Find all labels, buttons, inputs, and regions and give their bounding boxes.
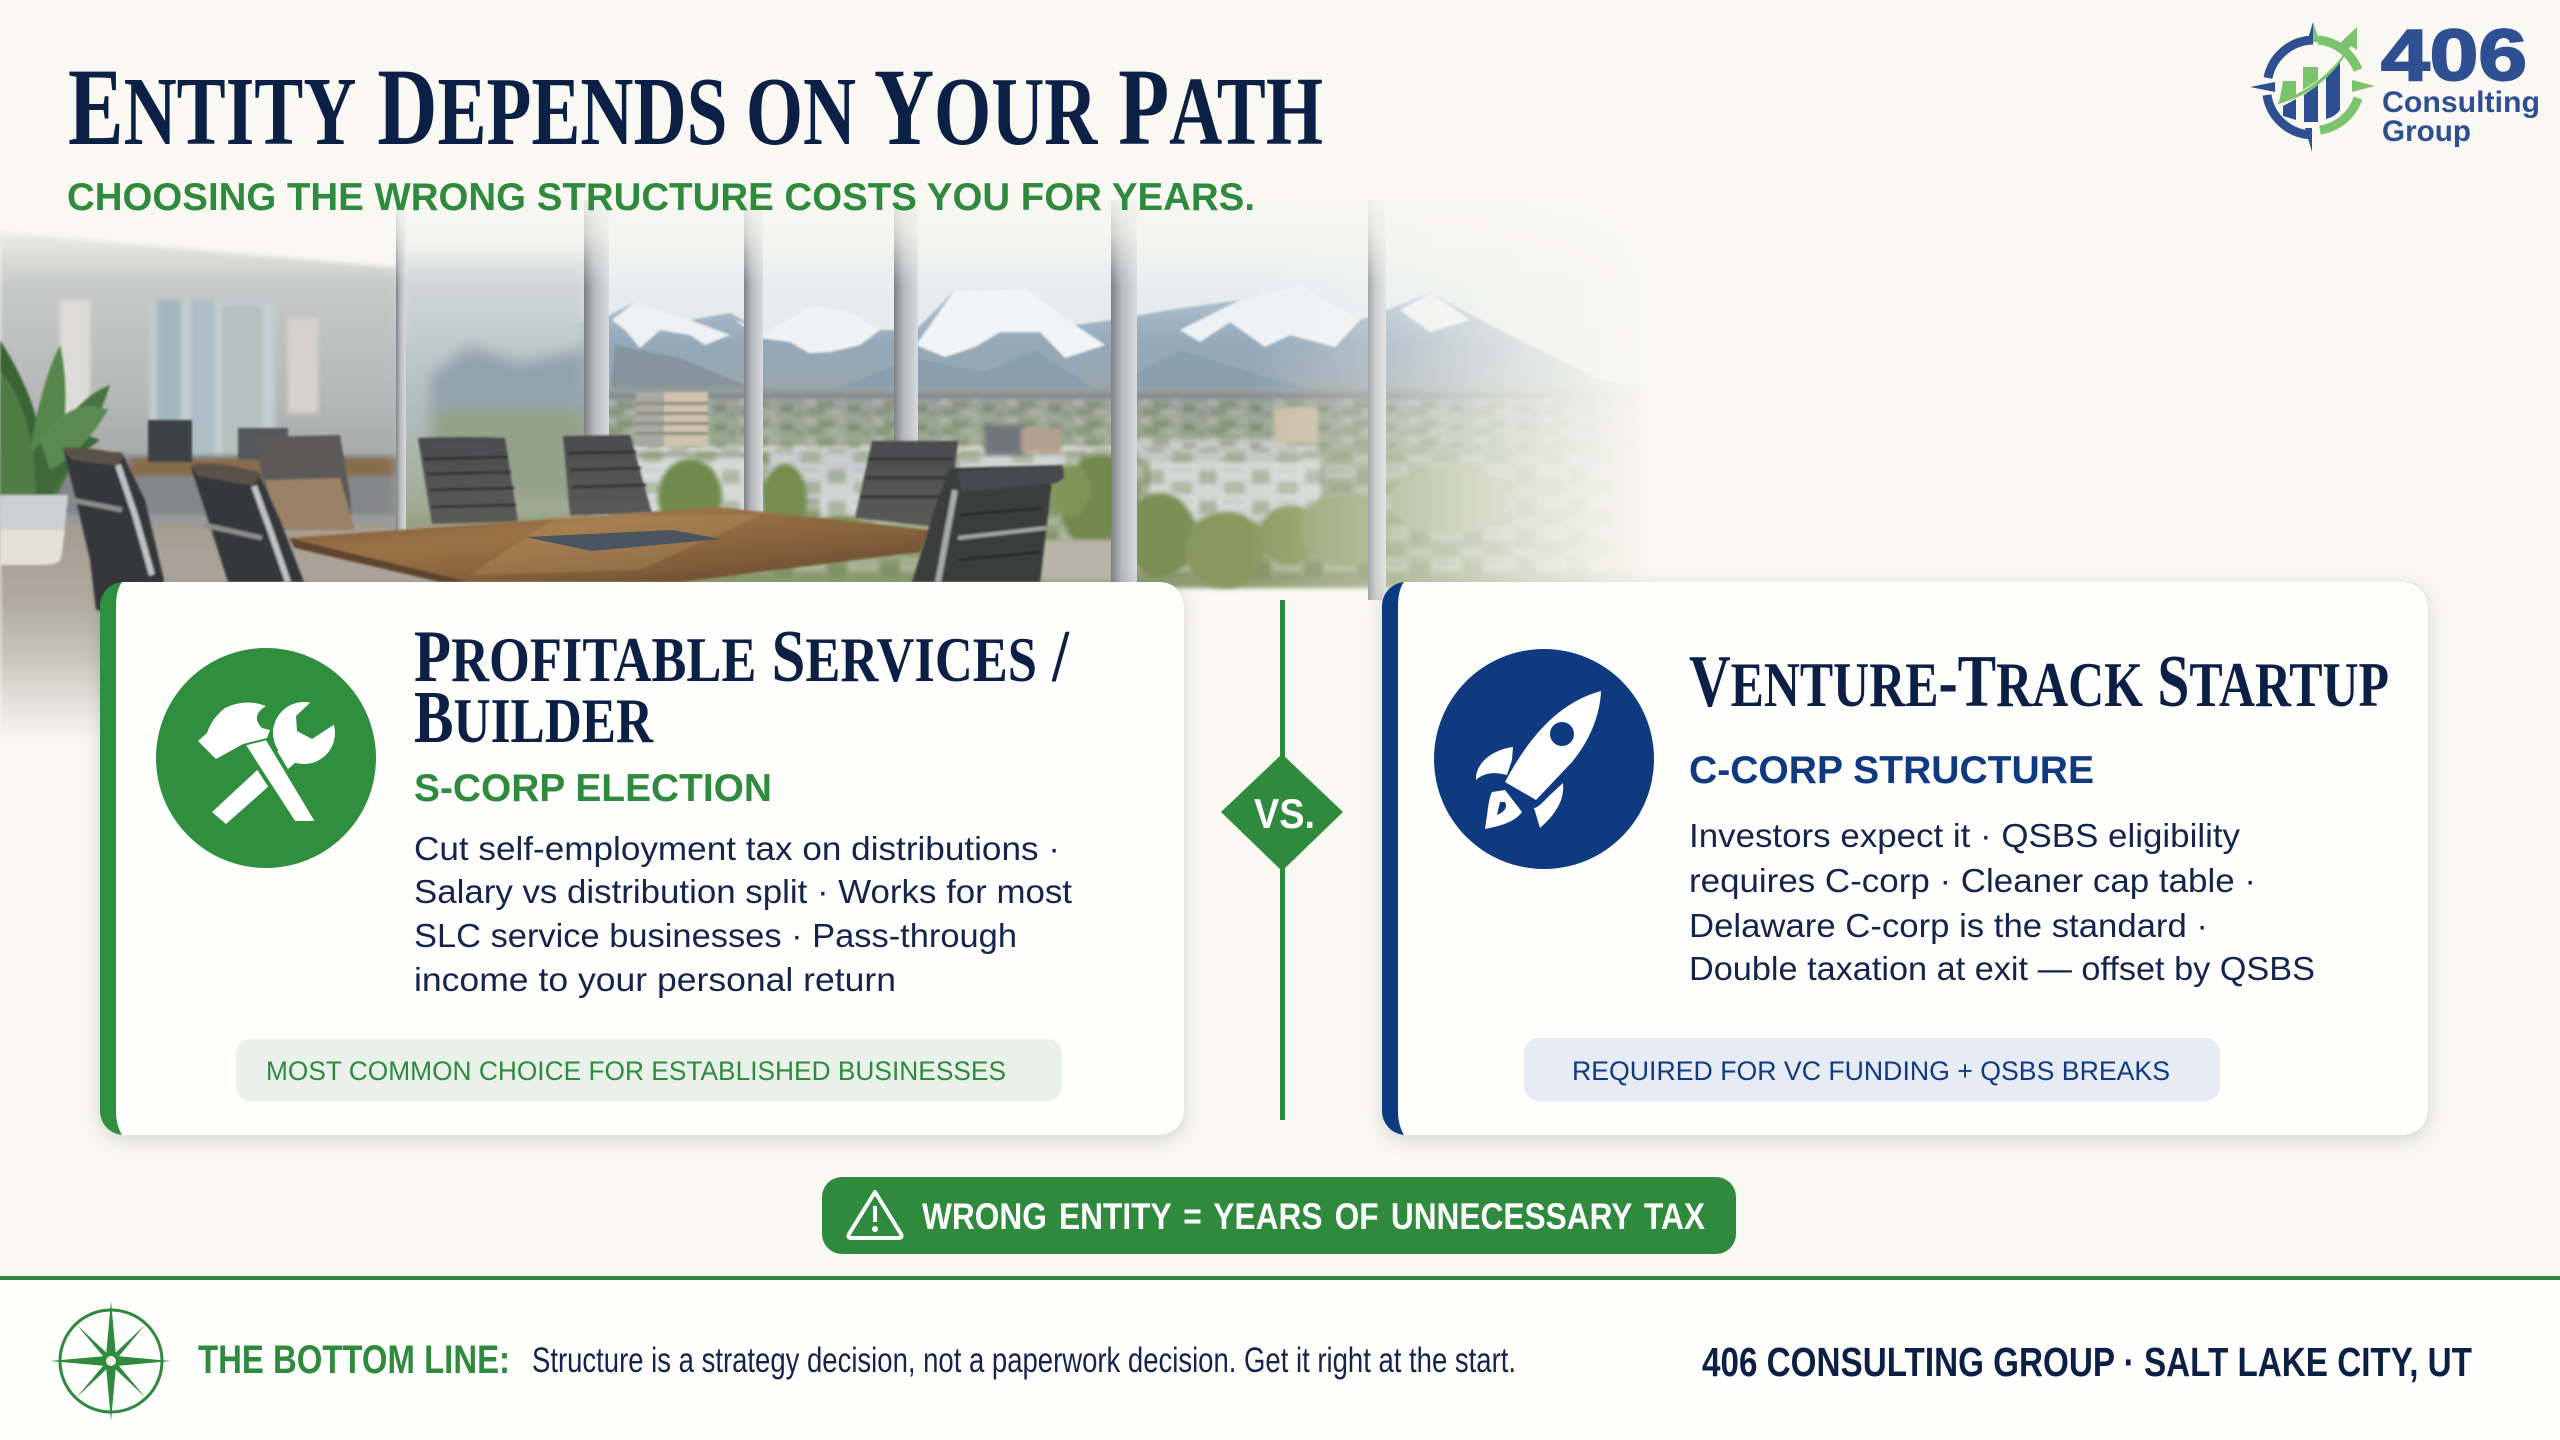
body text: Investors expect it · QSBS eligibility (1689, 817, 2241, 854)
callout: wrong entity banner: WRONG ENTITY = YEARS OF UNNECESSARY TAX (922, 1196, 1705, 1237)
body text (414, 830, 1072, 998)
photo: office tower (636, 392, 708, 446)
photo: conference table (289, 507, 930, 582)
icon: warning triangle (848, 1192, 902, 1238)
badge (1524, 1038, 2220, 1101)
icon: compass chart mark (2250, 22, 2375, 152)
body text: requires C-corp · Cleaner cap table · (1689, 862, 2256, 899)
footer (0, 1276, 2560, 1440)
divider with VS. diamond (1221, 600, 1343, 1120)
photo: front chairs (62, 448, 1064, 620)
icon: rocket (1434, 649, 1654, 869)
body text: SLC service businesses · Pass-through (414, 917, 1017, 954)
icon: hammer and wrench (156, 648, 376, 868)
card background with green edge (100, 582, 1184, 1135)
badge: MOST COMMON CHOICE FOR ESTABLISHED BUSINESSES (266, 1056, 1006, 1086)
logo wordmark 406: 406 (2381, 16, 2527, 96)
photo: potted plant (0, 340, 110, 565)
logo wordmark Group: Group (2382, 115, 2471, 148)
heading (414, 616, 1070, 759)
photo: city and trees (400, 388, 1700, 588)
title: ENTITY DEPENDS ON YOUR PATH (68, 46, 1323, 168)
body text: income to your personal return (414, 961, 896, 998)
body text (1689, 817, 2315, 987)
badge: REQUIRED FOR VC FUNDING + QSBS BREAKS (1572, 1056, 2170, 1086)
subheading: S-CORP ELECTION (414, 767, 772, 810)
photo: city texture (400, 400, 1700, 448)
badge (236, 1039, 1062, 1101)
heading: VENTURE-TRACK STARTUP (1689, 641, 2389, 723)
card background with blue edge (1382, 582, 2428, 1135)
body text: Delaware C-corp is the standard · (1689, 907, 2208, 944)
photo: lower city texture (610, 448, 1610, 578)
logo wordmark Consulting: Consulting (2382, 86, 2540, 119)
photo: trees and landmark buildings (658, 407, 1510, 588)
body text: Double taxation at exit — offset by QSBS (1689, 950, 2315, 987)
heading: PROFITABLE SERVICES / (414, 616, 1070, 698)
bottom line label: THE BOTTOM LINE: (198, 1338, 510, 1382)
divider with VS. diamond: VS. (1254, 790, 1315, 837)
subtitle: CHOOSING THE WRONG STRUCTURE COSTS YOU FOR YEARS. (67, 176, 1255, 219)
photo fade overlays (0, 185, 1760, 285)
photo: interior walls (0, 232, 400, 560)
photo: boardroom with mountain view (0, 185, 1770, 755)
photo: window mullions (396, 200, 1386, 600)
photo: floor (0, 525, 480, 740)
body text: Cut self-employment tax on distributions · (414, 830, 1060, 867)
panel: C-corp path (1382, 582, 2428, 1135)
photo: folder on table (526, 530, 721, 551)
photo: back chairs and table (148, 420, 958, 530)
panel: S-corp path (100, 582, 1184, 1135)
body text: Salary vs distribution split · Works for most (414, 873, 1072, 910)
callout: wrong entity banner (822, 1177, 1736, 1254)
heading: BUILDER (414, 677, 654, 759)
photo: sky (400, 200, 1700, 400)
logo: 406 Consulting Group (2250, 16, 2540, 152)
subheading: C-CORP STRUCTURE (1689, 749, 2094, 792)
photo: side glass partition (398, 255, 588, 515)
photo: mountains (400, 285, 1700, 400)
bottom line text: Structure is a strategy decision, not a paperwork decision. Get it right at the start. (532, 1341, 1516, 1380)
icon: compass rose (50, 1301, 171, 1421)
